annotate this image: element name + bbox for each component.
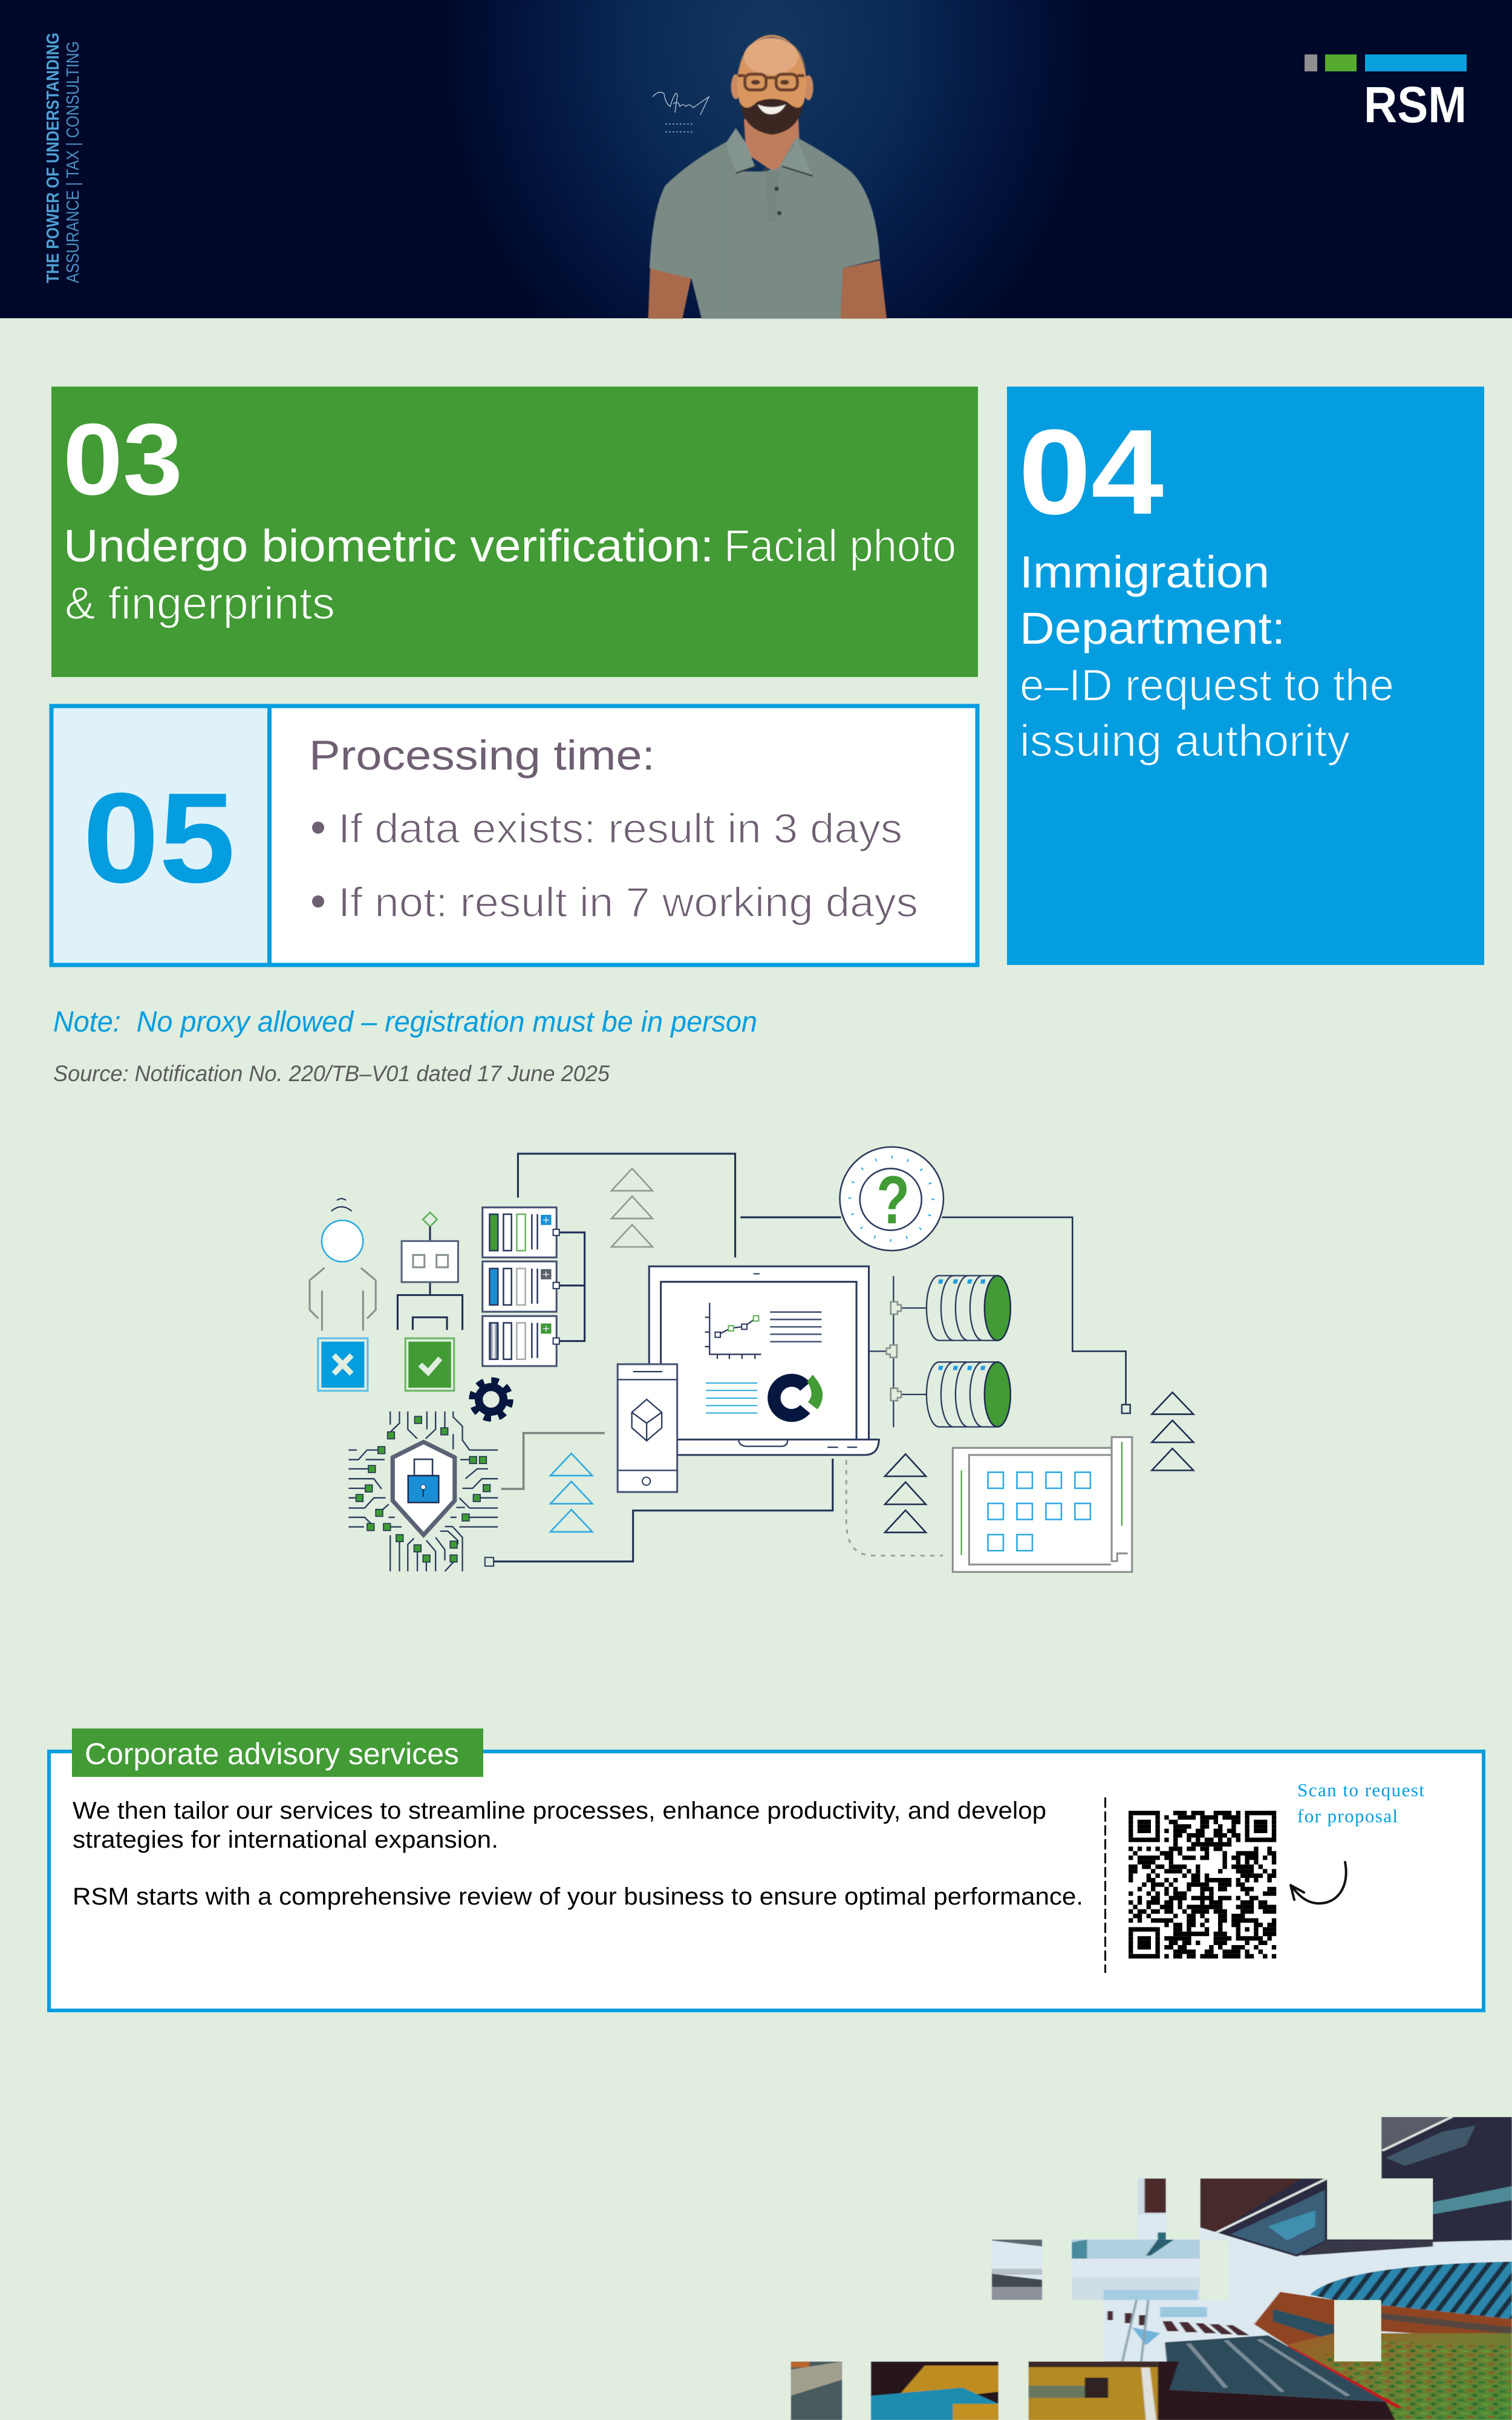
- icon: navy triangles right: [1152, 1392, 1193, 1470]
- step 03 text: [64, 520, 956, 629]
- processing time text: If not: result in 7 working days: [338, 879, 918, 926]
- signature: [653, 92, 709, 132]
- icon: C logo on laptop screen: [774, 1375, 823, 1416]
- step number 03: 03: [63, 402, 183, 516]
- header banner: [0, 0, 1512, 319]
- panel: step 04 immigration department: [1007, 387, 1484, 965]
- step 04 text: issuing authority: [1020, 716, 1350, 766]
- step 04 text: [1020, 547, 1394, 766]
- dashed divider: [1104, 1797, 1106, 1973]
- scan label: for proposal: [1297, 1805, 1398, 1826]
- connector lines: [485, 1154, 841, 1566]
- panel: step 05 processing time: [51, 706, 977, 965]
- heading tab: [72, 1728, 483, 1777]
- icon: person with reject box: [310, 1199, 376, 1391]
- vertical tagline: [44, 33, 83, 283]
- icon: question mark clock: [750, 1147, 1130, 1413]
- tile: upper strip: [1138, 2178, 1167, 2240]
- icon: grey triangles: [611, 1168, 653, 1247]
- step 03 text: Facial photo: [724, 520, 956, 571]
- sky tile: [1072, 2240, 1200, 2300]
- icon: database cylinders: [869, 1275, 1011, 1427]
- step number 05: 05: [83, 766, 235, 909]
- panel: corporate advisory services: [49, 1728, 1484, 2010]
- bottom tiles: [790, 2361, 1158, 2420]
- curved dome: [1311, 2261, 1512, 2319]
- icon: blue triangles: [550, 1453, 592, 1532]
- source: Source: Notification No. 220/TB–V01 dated 17 June 2025: [53, 1061, 610, 1086]
- note: Note: No proxy allowed – registration must be in person: [53, 1006, 757, 1038]
- technology illustration: [310, 1147, 1193, 1572]
- body text: We then tailor our services to streamline processes, enhance productivity, and develop: [73, 1797, 1046, 1824]
- scan label: Scan to request: [1297, 1779, 1424, 1800]
- building photo mosaic: [774, 2105, 1512, 2420]
- icon: document with grid: [953, 1437, 1132, 1572]
- body text: RSM starts with a comprehensive review of your business to ensure optimal performance.: [73, 1883, 1083, 1910]
- processing time text: [309, 732, 918, 926]
- QR code: [1129, 1813, 1276, 1957]
- step 03 text: & fingerprints: [65, 578, 335, 629]
- step 03 text: Undergo biometric verification:: [64, 520, 714, 571]
- step 04 text: e–ID request to the: [1020, 660, 1394, 710]
- processing time text: Processing time:: [309, 732, 655, 779]
- icon: gear: [472, 1380, 510, 1419]
- RSM logo: [1305, 54, 1467, 133]
- foliage: [1287, 2333, 1512, 2420]
- heading tab: Corporate advisory services: [85, 1737, 459, 1771]
- body text: strategies for international expansion.: [73, 1826, 498, 1853]
- icon: navy triangles lower: [885, 1454, 926, 1532]
- icon: question mark clock: ?: [876, 1162, 910, 1238]
- vertical tagline: ASSURANCE | TAX | CONSULTING: [64, 41, 83, 283]
- arrow to QR code: [1291, 1862, 1346, 1903]
- line chart on laptop screen: [705, 1303, 761, 1359]
- step 04 text: Immigration: [1020, 547, 1269, 597]
- icon: smartphone: [618, 1364, 677, 1492]
- icon: security shield with circuits: [348, 1411, 498, 1571]
- portrait photo: [648, 35, 887, 319]
- dashed connector: [846, 1460, 943, 1555]
- RSM logo: RSM: [1364, 76, 1467, 133]
- dark glass tower: [1200, 2117, 1512, 2257]
- icon: server rack: [483, 1208, 585, 1366]
- central glass: [1107, 2300, 1395, 2420]
- icon: laptop with dashboard: [648, 1266, 879, 1455]
- body text: [73, 1797, 1083, 1910]
- panel: step 03 biometric verification: [51, 387, 978, 677]
- scan label: [1297, 1779, 1424, 1826]
- icon: robot with approve box: [397, 1212, 463, 1391]
- tile: left sky strip: [991, 2240, 1043, 2300]
- processing time text: If data exists: result in 3 days: [338, 805, 902, 852]
- step 04 text: Department:: [1020, 603, 1285, 653]
- step number 04: 04: [1018, 405, 1164, 540]
- brick facade: [1254, 2292, 1512, 2346]
